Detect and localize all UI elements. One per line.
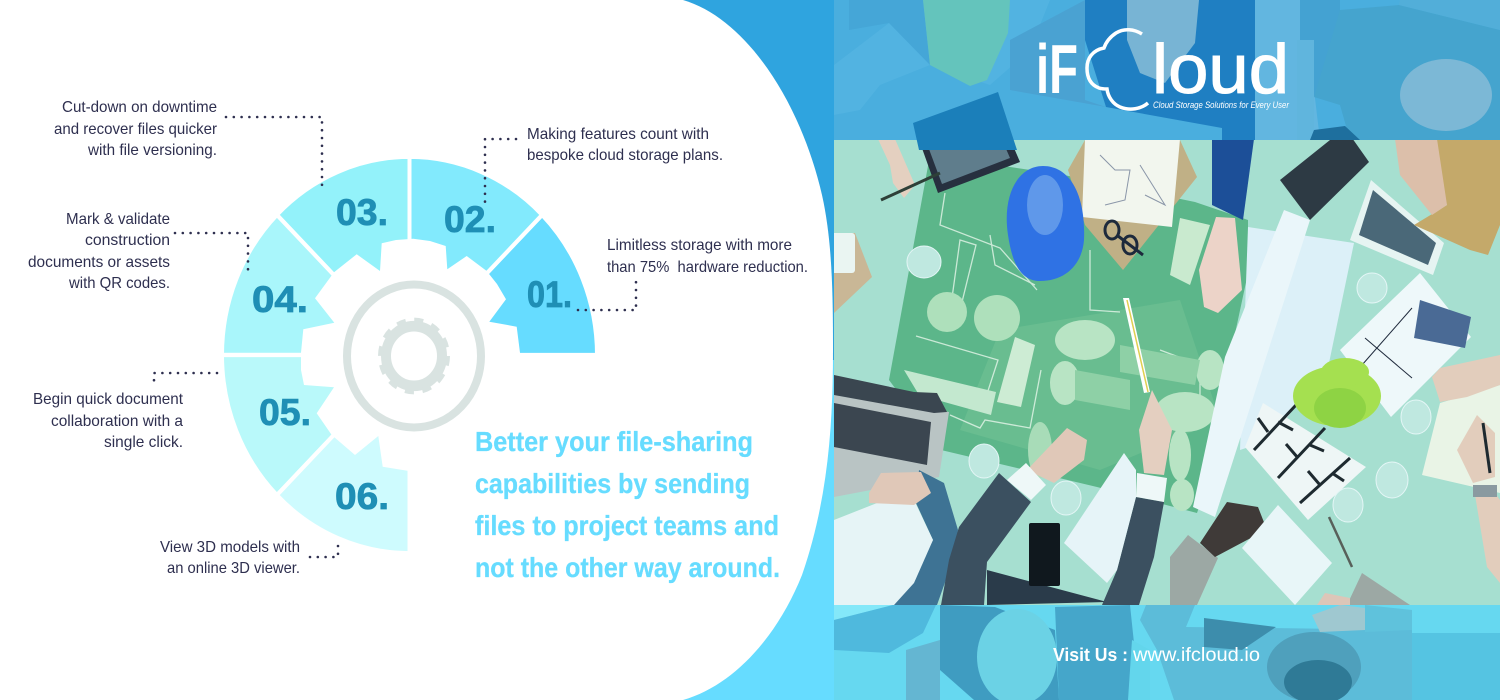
- blonde head: [1127, 0, 1199, 83]
- text: item 05: [33, 391, 184, 451]
- text: item 03: [54, 99, 218, 159]
- text: item 03: and recover files quicker: [54, 121, 218, 138]
- person in blue from above: [1085, 0, 1255, 140]
- text: item 05: Begin quick document: [33, 391, 184, 408]
- text: item 06: View 3D models with: [160, 539, 300, 556]
- jacket person: [1314, 5, 1500, 140]
- text: item 02: [527, 126, 723, 164]
- head from above: [1267, 632, 1361, 700]
- grey hair: [1400, 59, 1492, 131]
- text: item 01: than 75% hardware reduction.: [607, 259, 808, 276]
- text: item 04: documents or assets: [28, 254, 170, 271]
- logo: iFCloud: [1036, 30, 1290, 111]
- hand near head: [1312, 605, 1365, 632]
- green site plan: [889, 155, 1248, 513]
- blue hard hat: [1007, 166, 1084, 281]
- yellow ruler: [1123, 298, 1150, 393]
- face and hand: [1395, 139, 1447, 215]
- segment 03: [277, 157, 410, 355]
- panel: blue curved background: [660, 0, 834, 700]
- panel: blueprint meeting photo: [830, 0, 1500, 700]
- diagonal paper and calculator: [1340, 273, 1471, 417]
- right hand and notebook: [1422, 355, 1500, 583]
- text: item 03: Cut-down on downtime: [62, 99, 217, 116]
- tree sketch sheet: [1245, 403, 1366, 520]
- laptop: [834, 375, 949, 497]
- text: item 04: with QR codes.: [68, 275, 170, 292]
- text: item 03: with file versioning.: [87, 142, 217, 159]
- left-edge notebook: [830, 233, 872, 313]
- footer: website link: Visit Us :: [1053, 645, 1128, 665]
- center ring: [347, 284, 481, 428]
- logo wordmark left: iF: [1036, 30, 1078, 108]
- segment 06: [277, 355, 410, 553]
- leader line 03: [226, 117, 322, 190]
- number 01: 01.: [527, 274, 572, 315]
- tablet right: [1350, 180, 1444, 275]
- tablet top-left: [922, 150, 1020, 193]
- pointing hand: [1139, 390, 1172, 475]
- printed sheet: [1064, 453, 1136, 583]
- rolled blueprint and paper: [1193, 210, 1354, 517]
- number 05: 05.: [259, 392, 311, 433]
- leader line 06: [310, 541, 338, 557]
- segmented gear wheel: [222, 157, 597, 553]
- tan jacket: [1414, 139, 1500, 255]
- callout heading: not the other way around.: [475, 552, 780, 583]
- bottom photo band: [834, 605, 1500, 700]
- text: item 06: an online 3D viewer.: [167, 560, 300, 577]
- paper bottom right: [1242, 505, 1332, 605]
- person with dark coat: [940, 605, 1059, 700]
- hand with pencil: [878, 139, 940, 200]
- sketch notebook: [1082, 139, 1180, 227]
- text: item 04: construction: [85, 232, 170, 249]
- leader line 01: [578, 278, 636, 310]
- hand on plan: [1027, 428, 1087, 483]
- navy sleeve and hand: [1199, 139, 1254, 313]
- text: item 01: [607, 237, 808, 276]
- leader line 04: [175, 233, 248, 272]
- black book: [1280, 140, 1369, 220]
- segment 01: [410, 215, 597, 355]
- dark hand and tweed sleeve: [1170, 502, 1267, 605]
- segment 04: [222, 215, 410, 355]
- logo tagline: Cloud Storage Solutions for Every User: [1153, 100, 1290, 111]
- logo wordmark right: loud: [1152, 30, 1289, 108]
- text: item 05: collaboration with a: [51, 413, 183, 430]
- text: item 02: Making features count with: [527, 126, 709, 143]
- wheel segments: [222, 157, 597, 553]
- photo middle area: [830, 92, 1500, 605]
- black phone: [1029, 523, 1060, 586]
- top photo band: [834, 0, 1500, 150]
- pen: [1329, 517, 1352, 567]
- text: item 02: bespoke cloud storage plans.: [527, 147, 723, 164]
- leader line 05: [154, 373, 217, 385]
- footer: website link: www.ifcloud.io: [1132, 645, 1260, 666]
- hard hat on person: [923, 0, 1010, 86]
- number 04: 04.: [252, 279, 308, 320]
- callout heading: [475, 426, 780, 583]
- text: item 06: [160, 539, 300, 577]
- text: item 04: [28, 211, 170, 292]
- number 06: 06.: [335, 476, 389, 517]
- text: item 01: Limitless storage with more: [607, 237, 792, 254]
- leader line 02: [485, 139, 516, 203]
- panel: white curved content area: [0, 0, 833, 700]
- footer: website link: [1053, 645, 1260, 666]
- brown folder under notebook: [1068, 140, 1197, 270]
- grey jacket person: [1140, 605, 1412, 700]
- water glasses: [907, 246, 1431, 522]
- man at bottom left: [834, 470, 958, 605]
- green plant: [1293, 358, 1381, 428]
- segment 05: [222, 355, 410, 495]
- number 02: 02.: [444, 199, 496, 240]
- dark suit sleeves: [941, 473, 1164, 605]
- lower-right sleeve: [1317, 573, 1410, 605]
- segment 02: [410, 157, 542, 355]
- glasses: [1105, 221, 1143, 255]
- callout heading: capabilities by sending: [475, 468, 750, 499]
- logo cloud outline: [1087, 30, 1148, 109]
- white gear shape: [301, 239, 520, 472]
- callout heading: files to project teams and: [475, 510, 779, 541]
- tablet in band: [913, 92, 1017, 150]
- white shirt cuffs: [1007, 463, 1167, 502]
- dark tray under phone: [987, 570, 1107, 605]
- text: item 05: single click.: [104, 434, 183, 451]
- callout heading: Better your file-sharing: [475, 426, 753, 457]
- white hard hat from above: [977, 609, 1057, 700]
- text: item 04: Mark & validate: [66, 211, 170, 228]
- center gear icon: [380, 320, 448, 392]
- number 03: 03.: [336, 192, 388, 233]
